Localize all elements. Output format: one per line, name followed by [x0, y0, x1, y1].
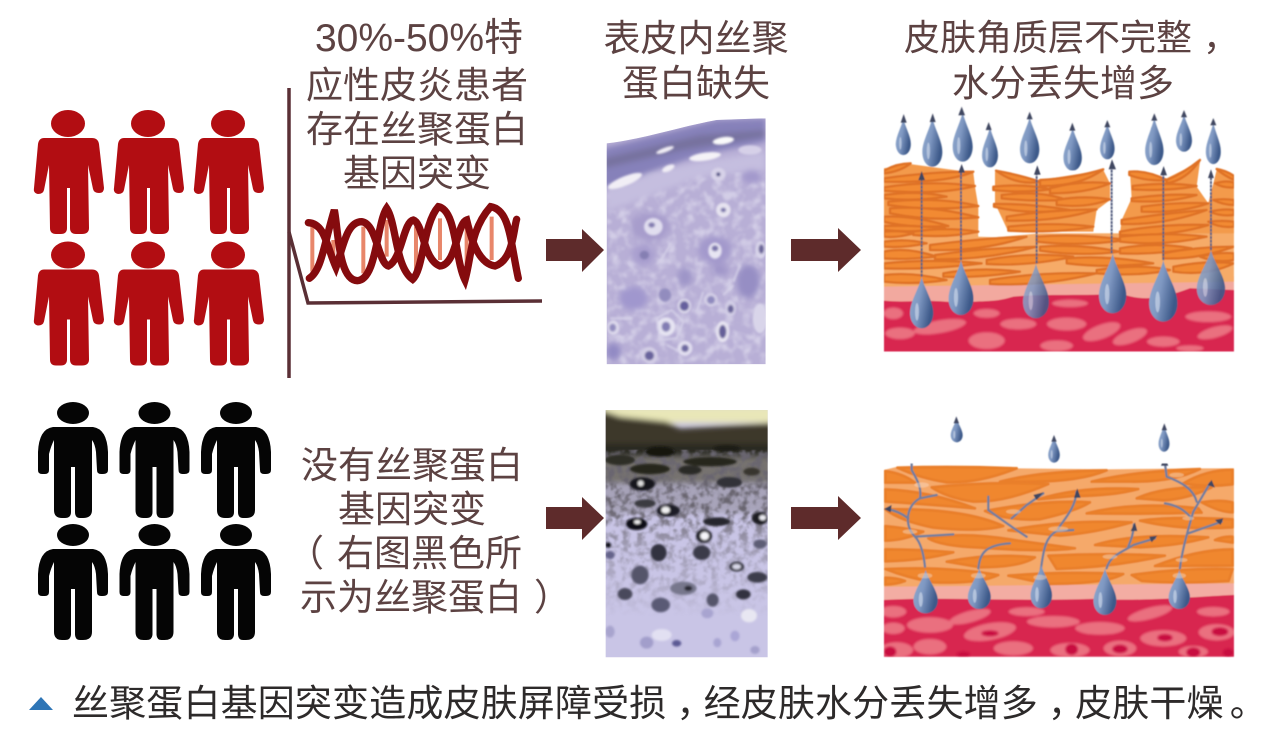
- text: mutation statistic: 存在丝聚蛋白: [306, 109, 528, 150]
- icon: black person: [120, 524, 190, 640]
- icon: red person: [114, 110, 184, 234]
- pale highlights over water paths: [903, 473, 1194, 580]
- DNA helix illustration: [308, 207, 518, 281]
- text: mutation statistic: [306, 17, 528, 194]
- branching blocked water paths: [884, 462, 1224, 570]
- lower water drops: [913, 565, 1190, 615]
- icon: red person: [194, 110, 264, 234]
- icon: red person: [114, 242, 184, 366]
- text: mutation statistic: 基因突变: [343, 153, 491, 194]
- arrow: genes to histology, bottom: [546, 497, 604, 540]
- icon group: black people without mutation: [38, 402, 271, 640]
- text: no filaggrin mutation: 基因突变: [338, 489, 486, 530]
- icon: red person: [34, 242, 104, 366]
- icon group: red people with mutation: [34, 110, 264, 366]
- text: mutation statistic: 应性皮炎患者: [306, 65, 528, 106]
- text: no filaggrin mutation: [287, 445, 571, 618]
- text: no filaggrin mutation: 没有丝聚蛋白: [301, 445, 523, 486]
- heading: filaggrin missing in epidermis: 表皮内丝聚: [604, 18, 788, 59]
- upper escaped water drops: [951, 416, 1169, 463]
- heading: filaggrin missing in epidermis: 蛋白缺失: [622, 63, 770, 104]
- upper escaped water drops: [896, 107, 1221, 171]
- orange stratum corneum: [884, 467, 1234, 587]
- arrow: genes to histology, top: [546, 229, 604, 272]
- histology photo: filaggrin deficient epidermis: [606, 118, 766, 364]
- histology photo: normal filaggrin staining: [606, 410, 768, 658]
- text: no filaggrin mutation: （ 右图黑色所: [287, 533, 522, 574]
- red dermis layer: [880, 580, 1235, 658]
- arrow: histology to skin, bottom: [791, 496, 861, 540]
- icon: black person: [201, 402, 271, 518]
- icon: red person: [194, 242, 264, 366]
- skin diagram: damaged barrier with water loss: [883, 107, 1234, 352]
- orange stratum corneum: [884, 160, 1234, 287]
- text: mutation statistic: 30%-50%特: [315, 17, 523, 60]
- heading: incomplete stratum corneum: 水分丢失增多: [952, 63, 1174, 104]
- water escape arrows: [918, 159, 1214, 277]
- lower water drops: [910, 250, 1225, 328]
- skin diagram: intact barrier with little water loss: [880, 416, 1235, 658]
- arrow: histology to skin, top: [791, 228, 861, 272]
- heading: incomplete stratum corneum: 皮肤角质层不完整 ，: [904, 17, 1239, 58]
- icon: black person: [38, 524, 108, 640]
- text: no filaggrin mutation: 示为丝聚蛋白 ）: [300, 577, 571, 618]
- icon: black person: [38, 402, 108, 518]
- heading: incomplete stratum corneum: [904, 17, 1239, 104]
- icon: black person: [201, 524, 271, 640]
- heading: filaggrin missing in epidermis: [604, 18, 788, 104]
- conclusion statement: 丝聚蛋白基因突变造成皮肤屏障受损 ，经皮肤水分丢失增多 ，皮肤干燥。: [72, 683, 1267, 724]
- icon: blue triangle bullet: [29, 697, 53, 710]
- icon: red person: [34, 110, 104, 234]
- red dermis layer: [883, 277, 1234, 352]
- bracket callout lines: [289, 88, 542, 378]
- icon: black person: [120, 402, 190, 518]
